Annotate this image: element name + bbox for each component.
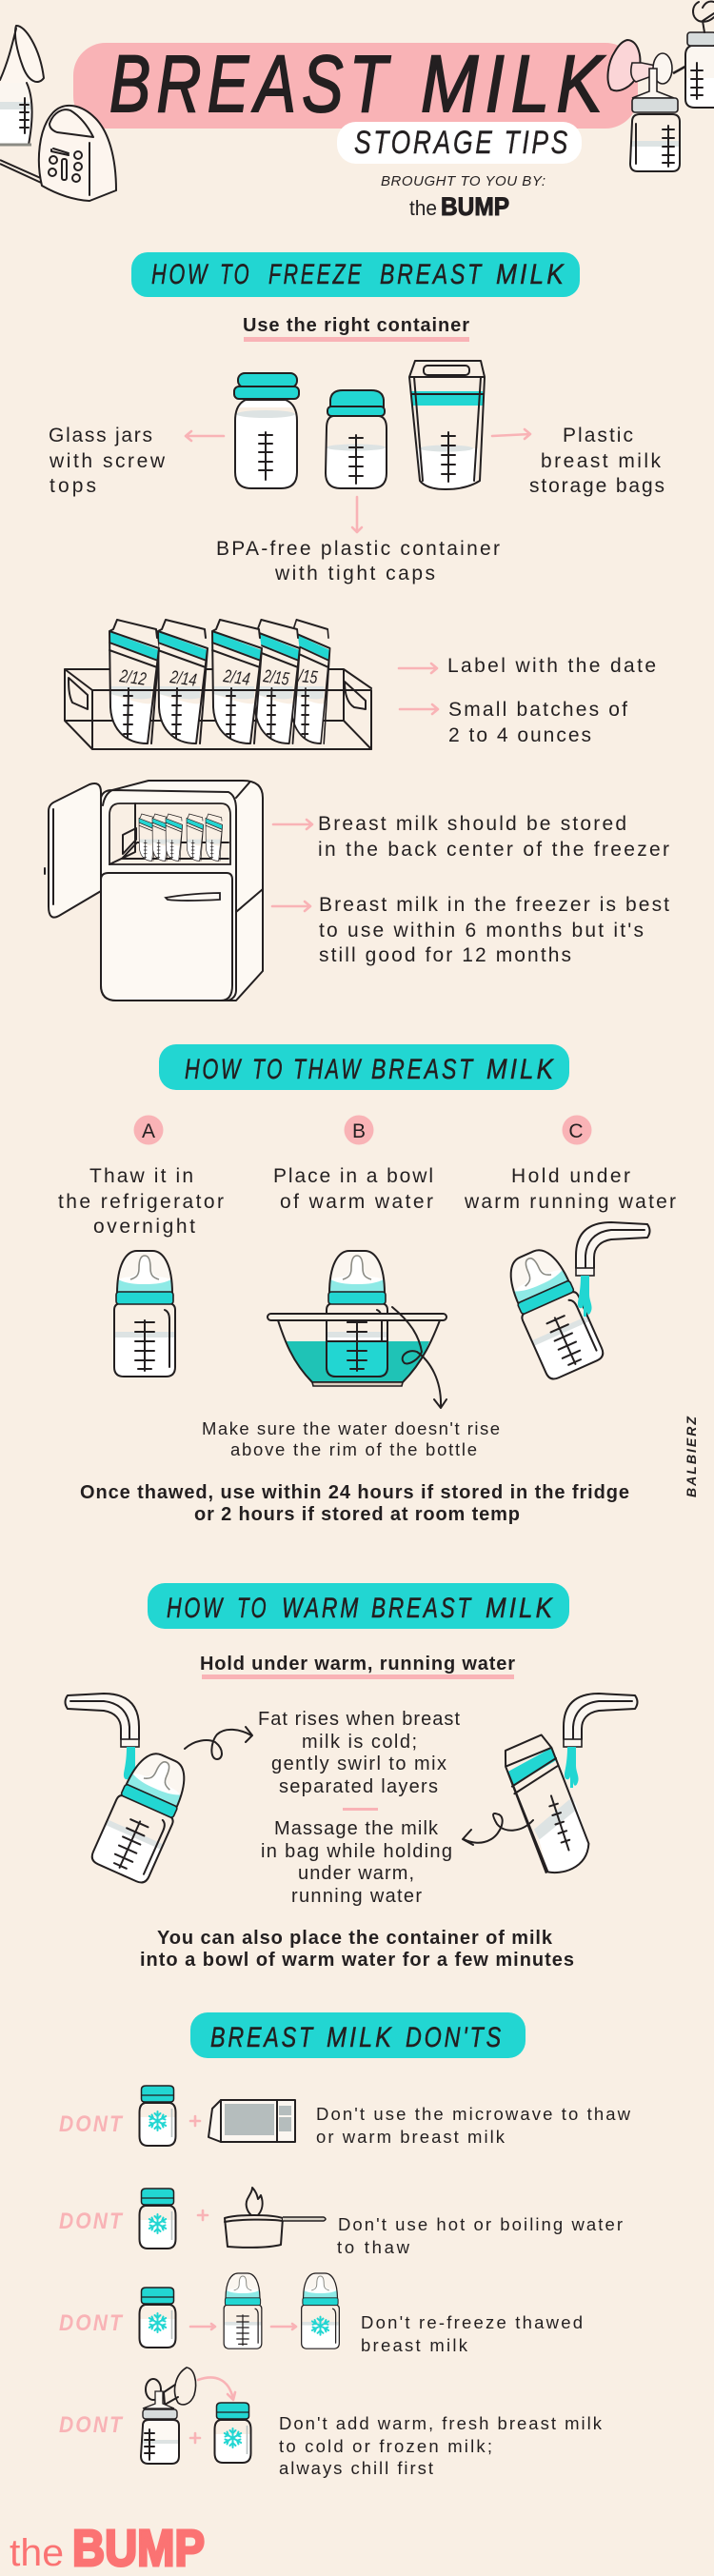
text: [361, 2312, 583, 2355]
arrow: label with date: [399, 664, 437, 673]
icon: frozen bottle: [302, 2273, 339, 2348]
text: plastic bags: breast milk: [541, 450, 661, 472]
heading: how to warm: BREAST: [371, 1593, 473, 1624]
illustration: labelled bags in tray: [65, 620, 371, 749]
illustration: labelled bags in tray: 2/14: [222, 666, 251, 690]
icon: bottle in bowl: [268, 1251, 446, 1408]
heading: how to thaw: TO: [252, 1054, 285, 1085]
footer logo: the Bump: [10, 2520, 205, 2576]
row: microwave: [59, 2086, 631, 2147]
the Bump logo: [409, 192, 509, 221]
icon: bottle A: [114, 1251, 175, 1377]
text: [279, 2413, 603, 2478]
text: warm bowl note: into a bowl of warm water for a few minutes: [140, 1950, 574, 1971]
header: [0, 1, 714, 221]
icon: breast pump, right: [608, 1, 714, 171]
text: always chill first: [279, 2458, 433, 2478]
text: Don't re-freeze thawed: [361, 2312, 583, 2332]
label: dont: DONT: [59, 2111, 124, 2137]
text: back center: in the back center of the freezer: [318, 839, 669, 861]
icon: pot and flame: [225, 2188, 326, 2248]
text: small batches: Small batches of: [448, 699, 627, 721]
text: glass jars: Glass jars: [49, 425, 152, 446]
heading: don'ts: [190, 2012, 526, 2058]
section: how to freeze: [45, 252, 669, 1001]
illustration: labelled bags in tray: 2/15: [262, 666, 290, 690]
footer logo: the Bump: the: [10, 2532, 64, 2574]
badge B: [345, 1116, 373, 1144]
heading: how to thaw: THAW: [293, 1054, 363, 1085]
text: once thawed: Once thawed, use within 24 hours if stored in the fridge: [80, 1482, 629, 1503]
icon: frozen jar: [215, 2403, 251, 2463]
label: dont: DONT: [59, 2310, 124, 2336]
text: option C: Hold under: [511, 1165, 630, 1187]
text: massage: [261, 1818, 452, 1907]
icon: frozen jar: [139, 2086, 175, 2146]
badge C: C: [568, 1120, 584, 1142]
heading: how to thaw: MILK: [486, 1054, 556, 1085]
subtitle: Storage Tips: STORAGE TIPS: [354, 125, 570, 161]
text: once thawed: or 2 hours if stored at room temp: [194, 1504, 520, 1525]
badge A: [133, 1116, 164, 1144]
illustration: freezer with bags: [45, 781, 263, 1001]
label: dont: DONT: [59, 2209, 124, 2234]
arrow: to plastic container: [352, 497, 362, 532]
heading: don'ts: DON'TS: [406, 2022, 504, 2053]
badge B: B: [352, 1120, 366, 1142]
section: don'ts: [59, 2012, 631, 2478]
title banner: [73, 43, 638, 129]
the Bump logo: the: [409, 196, 437, 220]
badge C: [562, 1116, 592, 1144]
text: six months: still good for 12 months: [319, 944, 571, 966]
text: option A: Thaw it in: [89, 1165, 193, 1187]
text: Don't use hot or boiling water: [338, 2214, 623, 2234]
icon: breast pump with machine, left: [0, 26, 116, 201]
brought to you by: BROUGHT TO YOU BY:: [381, 173, 545, 189]
text: option B: Place in a bowl: [273, 1165, 433, 1187]
text: fat rises: [258, 1709, 460, 1797]
arrow: swirl to massage note: [463, 1813, 533, 1845]
text: fat rises: gently swirl to mix: [271, 1754, 446, 1774]
text: six months: Breast milk in the freezer is best: [319, 894, 669, 916]
text: small batches: 2 to 4 ounces: [448, 724, 591, 746]
illustration: labelled bags in tray: 2/14: [169, 667, 198, 691]
text: BPA-free: BPA-free plastic container: [216, 538, 500, 560]
icon: frozen jar: [139, 2288, 175, 2348]
text: water rim note: above the rim of the bottle: [230, 1439, 477, 1459]
text: warm bowl note: [140, 1928, 574, 1971]
subheading: use the right container: Use the right container: [243, 315, 469, 336]
badge A: A: [142, 1120, 155, 1142]
heading: how to freeze: FREEZE: [268, 259, 364, 290]
plus: [190, 2433, 200, 2443]
text: back center: [318, 813, 669, 861]
text: small batches: [448, 699, 627, 746]
text: massage: running water: [291, 1886, 422, 1907]
title: Breast Milk: BREAST: [109, 39, 393, 129]
the Bump logo: BUMP: [441, 192, 509, 221]
title: Breast Milk: MILK: [421, 39, 609, 129]
text: option A: overnight: [93, 1216, 195, 1238]
row: re-freeze: [59, 2273, 583, 2355]
text: glass jars: with screw: [49, 450, 166, 472]
heading: don'ts: BREAST: [210, 2022, 315, 2053]
text: Don't add warm, fresh breast milk: [279, 2413, 603, 2433]
heading: how to warm: MILK: [486, 1593, 555, 1624]
arrow: to plastic bags: [492, 429, 530, 439]
heading: don'ts: MILK: [327, 2022, 394, 2053]
text: option C: [464, 1165, 676, 1213]
text: option C: warm running water: [464, 1191, 676, 1213]
footer logo: the Bump: BUMP: [72, 2520, 205, 2576]
section: how to thaw: [58, 1044, 699, 1525]
plus: [198, 2210, 208, 2220]
heading: how to freeze: MILK: [496, 259, 566, 290]
text: plastic bags: Plastic: [563, 425, 633, 446]
text: massage: Massage the milk: [274, 1818, 439, 1839]
row: boiling water: [59, 2188, 623, 2257]
text: to cold or frozen milk;: [279, 2436, 492, 2456]
text: six months: [319, 894, 669, 966]
text: [337, 2214, 623, 2257]
arrow: six months: [272, 902, 310, 911]
heading: how to thaw: BREAST: [371, 1054, 475, 1085]
text: BPA-free: [216, 538, 500, 585]
text: option A: [58, 1165, 224, 1238]
text: water rim note: [202, 1418, 500, 1459]
text: option B: [273, 1165, 433, 1213]
plus: [190, 2116, 200, 2126]
text: [316, 2104, 631, 2147]
text: glass jars: [49, 425, 166, 497]
heading: how to thaw: HOW: [185, 1054, 243, 1085]
credit: Balbierz: BALBIERZ: [684, 1417, 699, 1497]
divider: [343, 1808, 378, 1811]
text: massage: under warm,: [298, 1863, 414, 1884]
icon: bottle under faucet: [499, 1222, 649, 1381]
text: breast milk: [361, 2335, 468, 2355]
icon: bag under faucet, right: [500, 1694, 638, 1879]
icon: bottle: [224, 2273, 262, 2348]
icon: bottle under faucet, left: [65, 1694, 196, 1885]
heading: how to thaw: [159, 1044, 569, 1090]
text: Don't use the microwave to thaw: [316, 2104, 631, 2124]
text: to thaw: [337, 2237, 410, 2257]
icon: frozen jar: [139, 2189, 175, 2249]
arrow: [190, 2324, 215, 2329]
row: warm milk: [59, 2368, 603, 2478]
arrow: pump to jar: [198, 2377, 235, 2400]
text: fat rises: Fat rises when breast: [258, 1709, 460, 1730]
text: fat rises: separated layers: [279, 1776, 438, 1797]
icon: microwave: [208, 2100, 295, 2142]
text: six months: to use within 6 months but it's: [319, 920, 644, 941]
subtitle: Storage Tips: [337, 122, 582, 164]
icon: storage bag: [409, 361, 485, 489]
heading: how to freeze: BREAST: [380, 259, 484, 290]
heading: how to warm: TO: [237, 1593, 268, 1624]
heading: how to freeze: [131, 252, 580, 297]
illustration: labelled bags in tray: 2/12: [118, 666, 148, 690]
heading: how to freeze: HOW: [151, 259, 209, 290]
text: BPA-free: with tight caps: [274, 563, 435, 585]
heading: how to warm: [148, 1583, 569, 1629]
icon: pump: [141, 2368, 196, 2464]
text: option A: the refrigerator: [58, 1191, 224, 1213]
heading: how to warm: WARM: [282, 1593, 361, 1624]
text: glass jars: tops: [50, 475, 96, 497]
text: or warm breast milk: [316, 2127, 506, 2147]
arrow: swirl to fat note: [185, 1727, 252, 1759]
text: warm bowl note: You can also place the container of milk: [157, 1928, 553, 1949]
text: plastic bags: [529, 425, 664, 497]
arrow: [271, 2324, 296, 2329]
label: dont: DONT: [59, 2412, 124, 2438]
illustration: labelled bags in tray: /15: [296, 666, 319, 688]
text: label with the date: Label with the date: [447, 655, 656, 677]
text: massage: in bag while holding: [261, 1841, 452, 1862]
section: how to warm: [65, 1583, 638, 1971]
heading: how to warm: HOW: [167, 1593, 225, 1624]
subheading: hold under warm water: Hold under warm, running water: [200, 1654, 515, 1674]
text: option B: of warm water: [280, 1191, 433, 1213]
heading: how to freeze: TO: [220, 259, 251, 290]
icon: glass jar: [234, 373, 299, 488]
icon: plastic container: [326, 390, 387, 488]
text: once thawed: [80, 1482, 629, 1525]
arrow: back center: [273, 820, 312, 829]
arrow: small batches: [400, 704, 438, 714]
text: back center: Breast milk should be stored: [318, 813, 626, 835]
arrow: to glass jars: [186, 431, 224, 441]
text: water rim note: Make sure the water doesn't rise: [202, 1418, 500, 1438]
text: fat rises: milk is cold;: [302, 1732, 417, 1753]
text: plastic bags: storage bags: [529, 475, 664, 497]
